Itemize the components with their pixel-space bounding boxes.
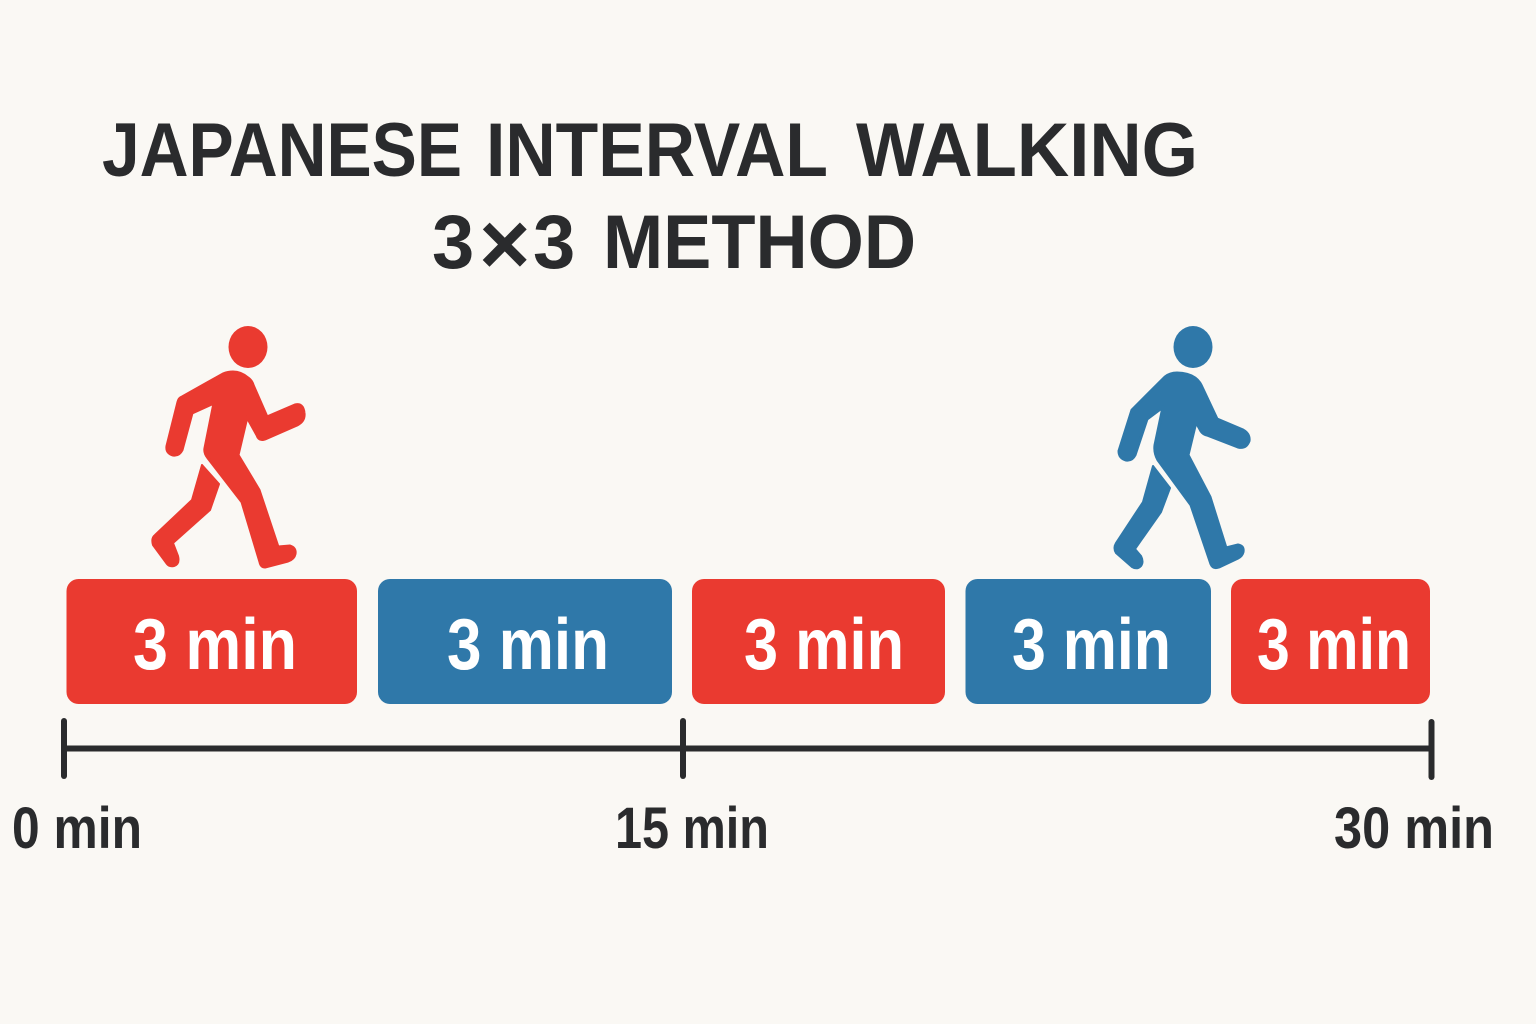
title [102, 108, 1198, 293]
title: WALKING [856, 108, 1198, 193]
title: INTERVAL [486, 108, 828, 193]
title: METHOD [603, 200, 916, 285]
title: × [479, 194, 530, 293]
segment: blue 3 min [966, 579, 1211, 704]
title: 3 [533, 200, 575, 285]
segment: blue 3 min: 3 min [447, 605, 609, 685]
segment: red 3 min [692, 579, 945, 704]
segment: blue 3 min [378, 579, 672, 704]
title: JAPANESE [102, 108, 462, 193]
segment: red 3 min: 3 min [1257, 605, 1411, 685]
icon: red running figure [152, 326, 304, 567]
label: 0 min: 0 min [12, 796, 142, 861]
segment: red 3 min: 3 min [133, 605, 297, 685]
label: 15 min: 15 min [615, 796, 769, 861]
label: 30 min: 30 min [1334, 796, 1494, 861]
segment: red 3 min [66, 579, 357, 704]
timeline axis [64, 721, 1432, 777]
segment: blue 3 min: 3 min [1012, 605, 1171, 685]
segment: red 3 min [1231, 579, 1430, 704]
segment: red 3 min: 3 min [744, 605, 904, 685]
icon: blue walking figure [1114, 326, 1249, 568]
title: 3 [432, 200, 474, 285]
